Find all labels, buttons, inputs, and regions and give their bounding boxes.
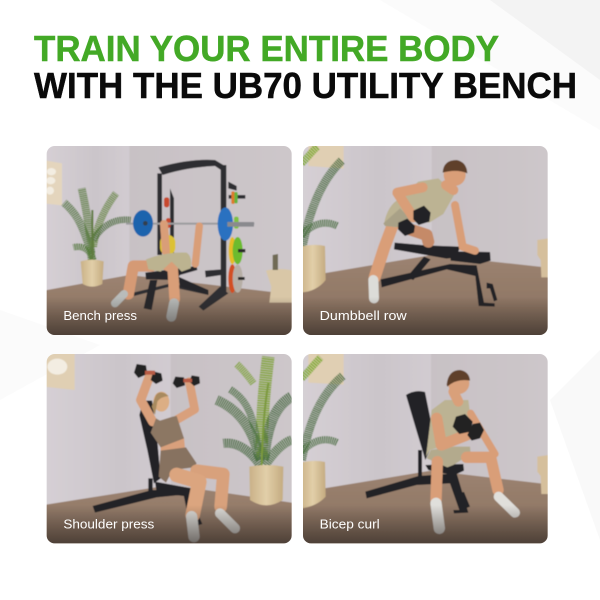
dumbbell bbox=[453, 414, 484, 441]
plant bbox=[302, 357, 343, 460]
title line 2: WITH THE UB70 UTILITY BENCH bbox=[34, 65, 577, 106]
side table bbox=[266, 254, 293, 303]
plant pot bbox=[300, 245, 326, 293]
wall art bbox=[308, 350, 344, 385]
plant bbox=[217, 357, 292, 467]
athlete bbox=[115, 224, 199, 317]
wall art bbox=[46, 354, 75, 390]
stool bbox=[537, 238, 548, 278]
plant pot bbox=[249, 465, 283, 505]
photo scene: shoulder press bbox=[43, 350, 297, 550]
photo scene: dumbbell row bbox=[300, 143, 552, 340]
caption: Bicep curl bbox=[320, 516, 380, 531]
athlete bbox=[373, 160, 475, 298]
squat rack bbox=[133, 160, 245, 311]
panel: dumbbell row bbox=[300, 143, 552, 340]
panel: bench press bbox=[43, 143, 297, 340]
bench bbox=[365, 391, 470, 513]
caption shade bbox=[303, 297, 548, 335]
title bbox=[34, 28, 577, 106]
plant bbox=[64, 188, 131, 260]
barbell bbox=[126, 207, 254, 241]
panel: bicep curl bbox=[300, 350, 552, 550]
panel: shoulder press bbox=[43, 350, 297, 550]
caption shade bbox=[47, 505, 292, 543]
caption shade bbox=[303, 505, 548, 543]
bench bbox=[93, 401, 202, 525]
weight plates on rack bbox=[160, 191, 245, 293]
plant pot bbox=[81, 260, 104, 287]
athlete bbox=[426, 370, 515, 528]
athlete bbox=[141, 375, 235, 537]
caption shade bbox=[47, 297, 292, 335]
photo scene: bench press bbox=[43, 143, 297, 340]
bench bbox=[381, 243, 497, 307]
room bbox=[300, 143, 552, 340]
room bbox=[43, 143, 297, 340]
plant bbox=[302, 147, 342, 250]
caption: Dumbbell row bbox=[320, 308, 407, 323]
caption: Shoulder press bbox=[63, 516, 155, 531]
photo scene: bicep curl bbox=[300, 350, 552, 550]
wall art bbox=[308, 143, 344, 169]
plant pot bbox=[300, 461, 326, 509]
room bbox=[43, 350, 297, 550]
dumbbells bbox=[134, 364, 200, 388]
room bbox=[300, 350, 552, 550]
caption: Bench press bbox=[63, 308, 138, 323]
dumbbell bbox=[398, 206, 431, 236]
wall art bbox=[46, 160, 62, 206]
bench bbox=[144, 266, 208, 310]
title line 1: TRAIN YOUR ENTIRE BODY bbox=[34, 28, 499, 69]
stool bbox=[537, 455, 552, 494]
